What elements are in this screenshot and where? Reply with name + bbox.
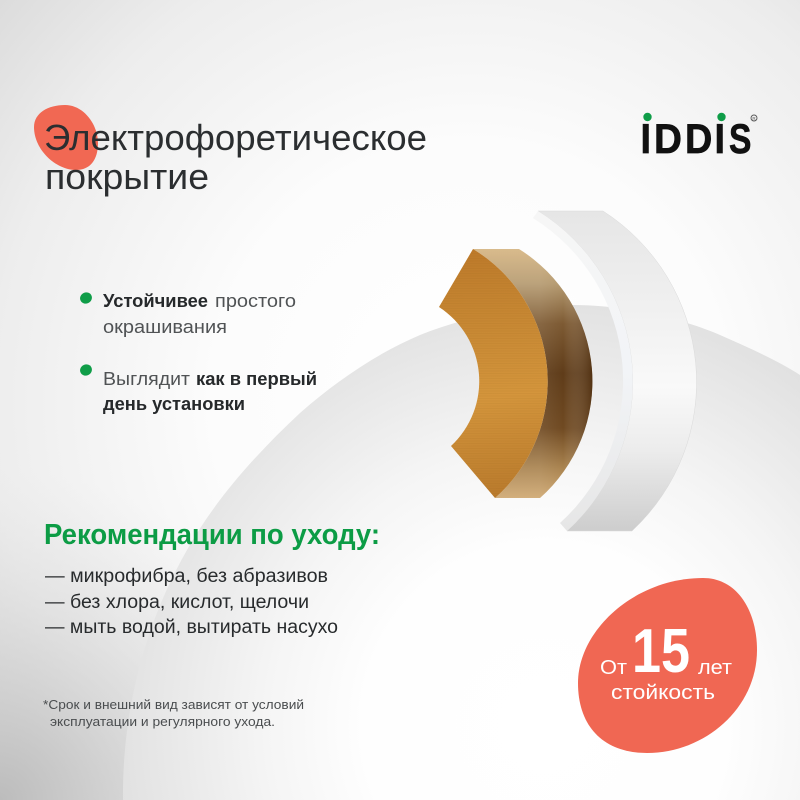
white coating arc [533,211,697,531]
logo: IDDIS: I [640,116,651,162]
title [44,117,427,197]
title accent blob [34,105,98,170]
bullet 1: простого [215,291,296,311]
care list: — мыть водой, вытирать насухо [45,617,338,638]
badge: 15 years: лет [698,657,732,679]
gold metal arc [439,249,592,498]
care list [45,566,338,638]
logo: IDDIS: D [654,114,682,162]
footnote: эксплуатации и регулярного ухода. [50,715,275,729]
badge: 15 years: От [600,657,627,679]
title: покрытие [45,156,209,197]
care list: — микрофибра, без абразивов [45,566,328,587]
bullet 2: как в первый [196,369,317,389]
footnote [43,698,304,729]
background disc [123,305,800,800]
badge: 15 years: 15 [632,617,690,686]
gold face [439,249,548,498]
gold side [473,249,592,498]
logo: IDDIS: S [729,117,751,163]
care heading: Рекомендации по уходу: [44,519,380,551]
logo: IDDIS: R [752,116,756,121]
bullet 2: Выглядит [103,369,190,389]
logo: IDDIS [640,113,757,163]
care list: — без хлора, кислот, щелочи [45,592,309,613]
logo: IDDIS: D [685,116,712,162]
bullet 1: Устойчивее [103,291,208,311]
footnote: *Срок и внешний вид зависят от условий [43,698,304,712]
bullet 1: окрашивания [103,317,227,337]
bullet 1 [78,290,296,337]
badge: 15 years [578,578,757,753]
bullet 2: день установки [103,394,245,414]
bullet list [78,290,317,414]
logo: IDDIS: I [714,116,725,162]
title: Электрофоретическое [44,117,427,158]
bullet 2 [78,362,317,414]
badge: 15 years: стойкость [611,682,715,704]
